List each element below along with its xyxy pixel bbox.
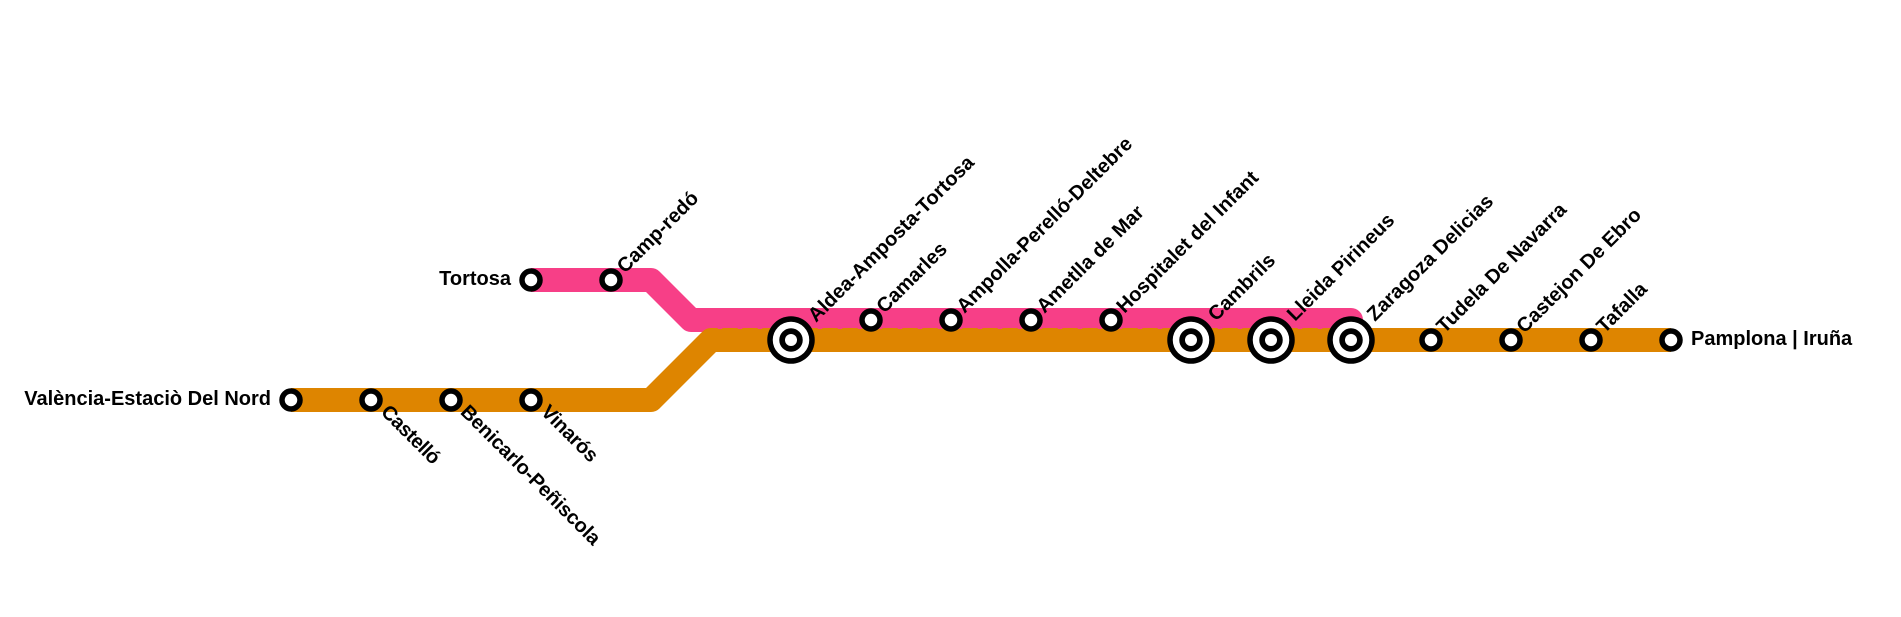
interchange: Zaragoza Delicias: Zaragoza Delicias (1363, 191, 1498, 326)
station: Tortosa: Tortosa (439, 268, 512, 290)
pink line (531, 280, 1351, 340)
station: Ametlla de Mar: Ametlla de Mar (1032, 201, 1149, 318)
interchange: Lleida Pirineus: Lleida Pirineus (1283, 209, 1399, 326)
station: Benicarlo-Peñiscola: Benicarlo-Peñiscola (456, 401, 605, 550)
orange line (291, 340, 1671, 400)
interchange: Cambrils (1167, 249, 1280, 364)
station: Hospitalet del Infant: Hospitalet del Infant (1112, 167, 1263, 318)
station: Castelló: Castelló (376, 401, 444, 469)
interchange: Zaragoza Delicias (1327, 191, 1498, 364)
station: Tafalla: Tafalla (1592, 278, 1652, 338)
station: València-Estaciò Del Nord: València-Estaciò Del Nord (24, 388, 271, 410)
station: Tudela De Navarra: Tudela De Navarra (1432, 198, 1572, 338)
station: Pamplona | Iruña: Pamplona | Iruña (1691, 328, 1853, 350)
interchange: Lleida Pirineus (1247, 209, 1399, 364)
station: Camarles: Camarles (872, 238, 952, 318)
station: Tafalla (1582, 278, 1652, 349)
station: Castejon De Ebro: Castejon De Ebro (1512, 204, 1646, 338)
interchange: Aldea-Amposta-Tortosa: Aldea-Amposta-Tortosa (804, 151, 979, 327)
station: Vinarós: Vinarós (536, 401, 602, 467)
interchange: Cambrils: Cambrils (1204, 249, 1280, 326)
interchange: Aldea-Amposta-Tortosa (767, 151, 979, 364)
station: Camp-redó: Camp-redó (613, 187, 703, 278)
station: Ampolla-Perelló-Deltebre: Ampolla-Perelló-Deltebre (952, 133, 1137, 318)
